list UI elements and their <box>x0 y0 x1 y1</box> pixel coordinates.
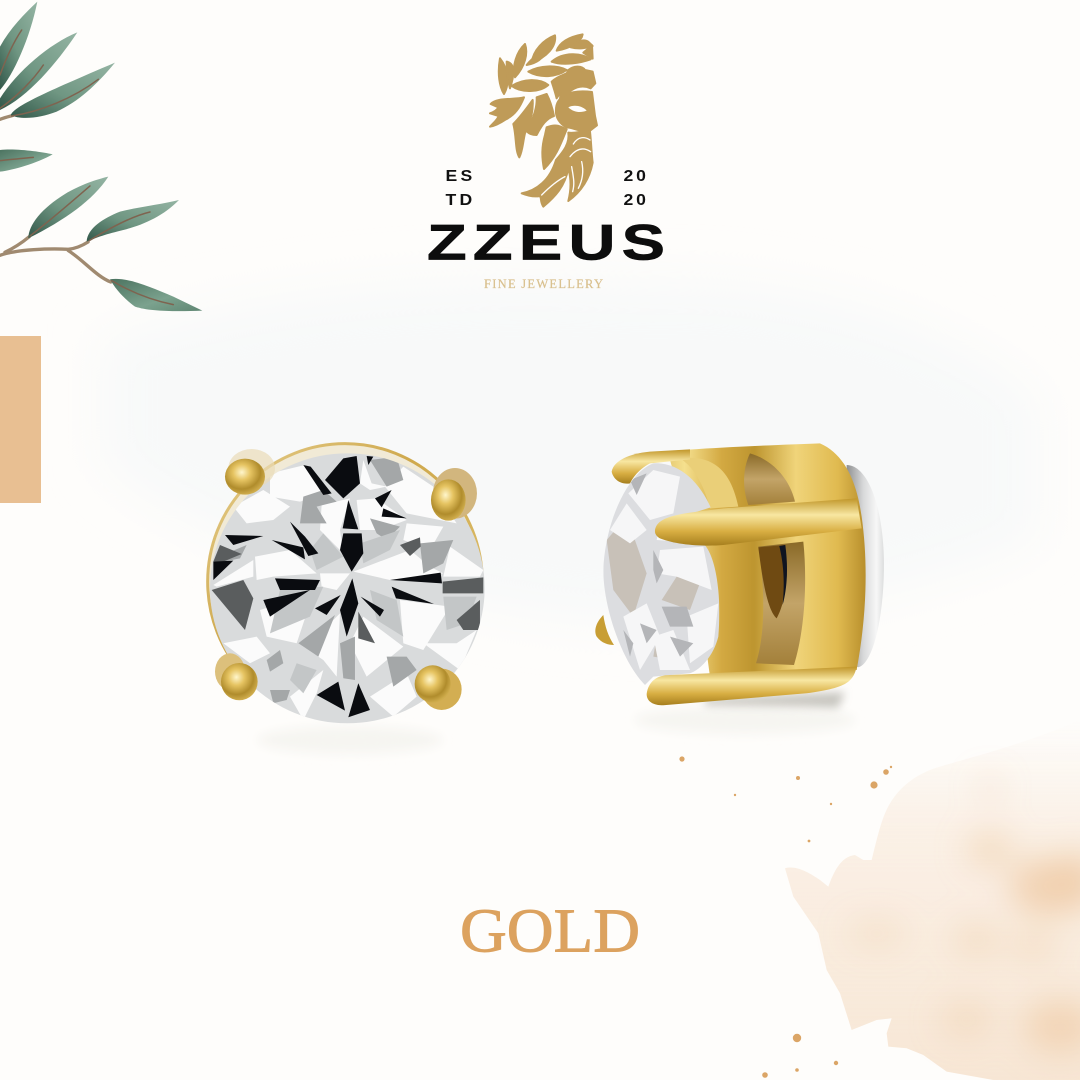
earring: front view <box>203 444 490 730</box>
leaf stems <box>0 115 111 282</box>
logo: 2020 label <box>624 167 649 209</box>
earring: side view <box>595 443 884 705</box>
leaf 5 <box>28 177 108 238</box>
stain shape <box>785 720 1080 1080</box>
slot hole <box>758 545 787 618</box>
prong top left <box>225 449 275 495</box>
silver back <box>847 465 884 667</box>
middle prong <box>655 498 862 546</box>
leaf 3 <box>11 63 115 118</box>
grey facets <box>223 457 480 703</box>
background wash <box>100 279 1040 624</box>
hair locks <box>490 97 524 127</box>
logo: 2020 label: 20 <box>624 167 649 185</box>
logo: EST label <box>446 167 476 209</box>
hair and face <box>560 67 595 102</box>
upper slot <box>744 453 795 505</box>
bottom prong <box>647 667 857 705</box>
eye <box>568 106 587 112</box>
logo: 2020 label: 20 <box>624 191 649 209</box>
top prong <box>612 449 690 484</box>
gold body <box>633 443 866 677</box>
prong bottom left <box>215 653 258 700</box>
logo: Zeus head emblem <box>490 34 597 207</box>
leaf veins <box>0 30 173 305</box>
gem facets <box>606 532 699 658</box>
leaf 1 <box>0 2 37 90</box>
slot hole shadow <box>779 545 787 605</box>
laurel leaves <box>499 34 593 98</box>
leaf 7 <box>110 279 202 311</box>
prong bottom right <box>415 665 462 710</box>
splatter dots <box>679 756 892 1078</box>
beard <box>542 125 567 169</box>
gold rim <box>208 444 482 720</box>
logo: EST label: ES <box>446 167 476 185</box>
mid grey facets <box>270 530 477 693</box>
gem side <box>600 460 723 690</box>
earring shadows <box>258 692 855 754</box>
leaf 4 <box>0 150 53 172</box>
prong top right <box>431 468 477 521</box>
logo: tagline: FINE JEWELLERY <box>484 277 603 291</box>
dark grey facets <box>212 537 483 643</box>
watercolor stain bottom right <box>679 720 1080 1080</box>
logo: EST label: TD <box>446 191 476 209</box>
accent bar <box>0 336 41 503</box>
product label: GOLD <box>460 898 640 966</box>
white facets <box>213 460 483 720</box>
stain blotches <box>847 777 1080 1053</box>
logo: wordmark: ZZEUS <box>427 216 671 271</box>
beard line work <box>542 138 591 195</box>
leaf 6 <box>87 200 179 242</box>
black facets <box>213 456 442 717</box>
lower left prong <box>595 615 614 645</box>
top band shade <box>680 458 738 508</box>
lower slot <box>756 542 805 665</box>
leaf 2 <box>0 32 77 110</box>
diamond <box>203 447 490 730</box>
branch with leaves <box>0 2 202 311</box>
